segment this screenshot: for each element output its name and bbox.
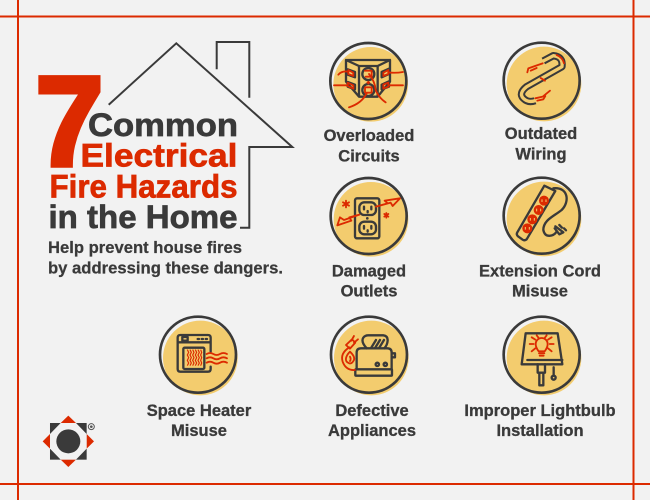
title: Fire Hazards (50, 169, 238, 205)
label: improper lightbulb installation: Installation (496, 422, 584, 440)
subtitle (48, 238, 283, 278)
icon: extension cord (504, 178, 581, 256)
logo (43, 416, 94, 467)
label: damaged outlets: Outlets (341, 282, 397, 300)
label: space heater misuse: Misuse (171, 422, 227, 440)
label: outdated wiring: Wiring (515, 146, 567, 164)
label: overloaded circuits: Overloaded (324, 127, 414, 145)
subtitle: Help prevent house fires (48, 238, 242, 257)
icon: space heater (160, 317, 238, 395)
icon: overloaded circuits (330, 43, 408, 122)
title: Common (88, 107, 238, 143)
label: improper lightbulb installation: Improper Lightbulb (464, 402, 616, 420)
icon: damaged outlets (331, 178, 408, 257)
label: overloaded circuits: Circuits (338, 148, 400, 166)
house outline (109, 42, 292, 228)
icon: defective appliances (331, 317, 409, 395)
label: space heater misuse: Space Heater (147, 402, 251, 420)
title: 7 (36, 50, 104, 192)
icon: outdated wiring (504, 43, 581, 121)
label: extension cord misuse: Misuse (512, 282, 568, 300)
title: in the Home (48, 199, 238, 235)
icon: improper lightbulb (504, 317, 581, 395)
label: damaged outlets: Damaged (332, 262, 406, 280)
subtitle: by addressing these dangers. (48, 258, 283, 278)
label: defective appliances: Appliances (328, 422, 416, 440)
label: outdated wiring: Outdated (505, 125, 577, 143)
label: extension cord misuse: Extension Cord (479, 262, 601, 280)
title (36, 50, 238, 235)
label: defective appliances: Defective (335, 402, 409, 420)
title: Electrical (80, 138, 237, 174)
